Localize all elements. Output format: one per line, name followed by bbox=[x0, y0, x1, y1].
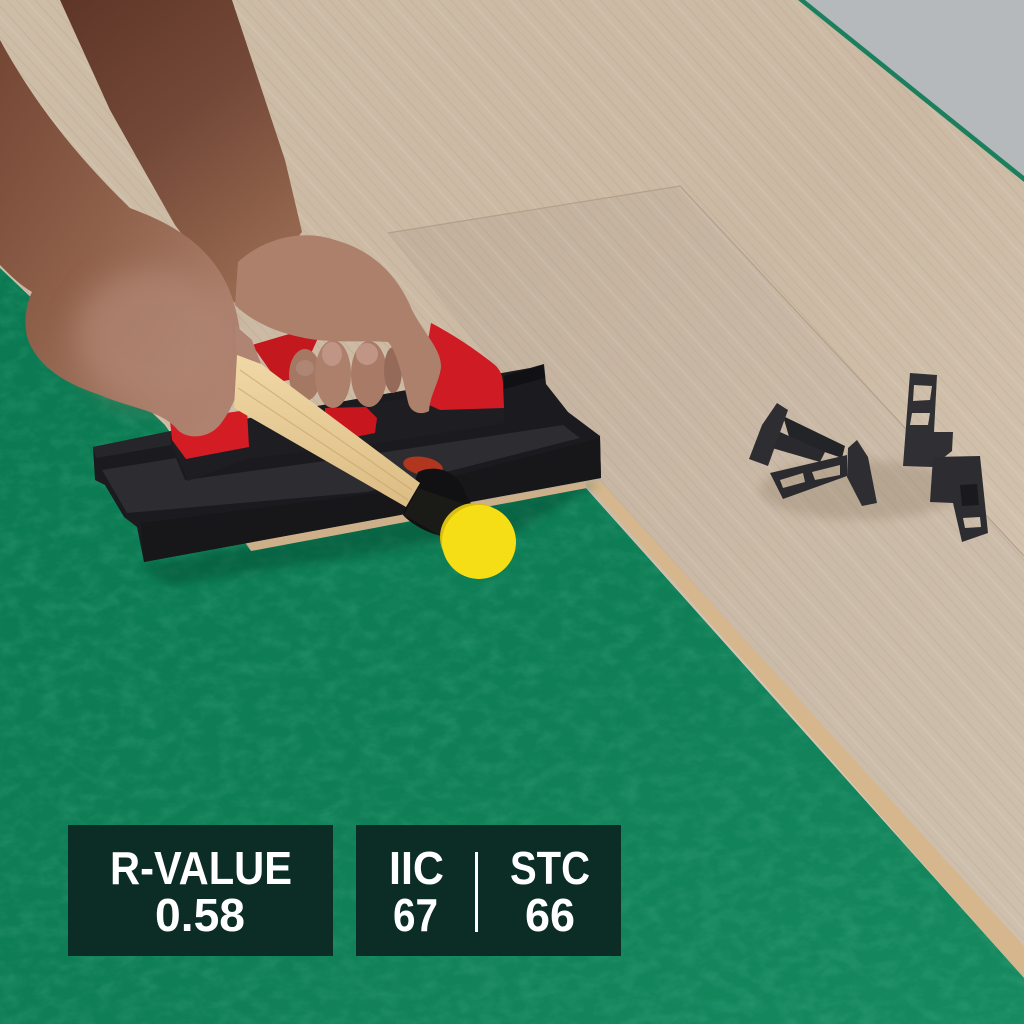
fingernails bbox=[296, 342, 378, 376]
tapping block tool bbox=[93, 323, 601, 562]
wall bbox=[798, 0, 1024, 182]
right forearm bbox=[60, 0, 302, 310]
label: STC: STC bbox=[510, 842, 590, 894]
base front face bbox=[141, 438, 601, 562]
shadow under tool bbox=[140, 482, 600, 585]
base top surface bbox=[102, 425, 580, 513]
spacer C bbox=[903, 373, 953, 467]
rear rail bbox=[93, 431, 171, 458]
yellow mallet face bbox=[440, 503, 516, 579]
mallet black head bbox=[403, 469, 472, 536]
value: STC: 66 bbox=[525, 889, 575, 941]
new floor plank bbox=[388, 186, 1024, 946]
right hand gripping tool bbox=[60, 0, 441, 413]
badge: R-value bbox=[68, 825, 333, 956]
left hand holding mallet bbox=[0, 40, 261, 436]
mallet glossy collar bbox=[404, 488, 470, 538]
badge: IIC and STC bbox=[356, 825, 621, 956]
handle base black bbox=[170, 385, 504, 481]
thin plank tongue under tool bbox=[247, 482, 587, 551]
value: R-value: 0.58 bbox=[155, 889, 245, 941]
mallet bbox=[234, 355, 516, 579]
back of hand and thumb bbox=[235, 235, 441, 413]
plank edge strip bbox=[585, 481, 1024, 978]
spacers bbox=[749, 373, 988, 542]
mallet red ring bbox=[402, 454, 444, 478]
divider bbox=[475, 852, 478, 932]
green underlayment bbox=[0, 268, 1024, 1024]
right red grip bbox=[418, 323, 504, 410]
wooden handle bbox=[234, 355, 420, 507]
knuckle highlight bbox=[75, 270, 225, 400]
label: R-value: R-VALUE bbox=[110, 842, 292, 894]
red grip bar bbox=[252, 332, 318, 382]
handle grain bbox=[238, 370, 412, 500]
right rear rail bbox=[504, 365, 545, 389]
spacer A bbox=[749, 403, 845, 466]
spacer B bbox=[770, 440, 877, 506]
label: IIC: IIC bbox=[389, 842, 444, 894]
red center knob bbox=[325, 407, 377, 438]
black base bbox=[93, 364, 601, 562]
spacer D bbox=[930, 456, 988, 542]
fingers on grip bbox=[289, 340, 402, 408]
value: IIC: 67 bbox=[393, 889, 438, 941]
left red grip bbox=[170, 410, 249, 459]
spacer shadows bbox=[760, 460, 960, 520]
thumb near handle bbox=[235, 325, 261, 364]
